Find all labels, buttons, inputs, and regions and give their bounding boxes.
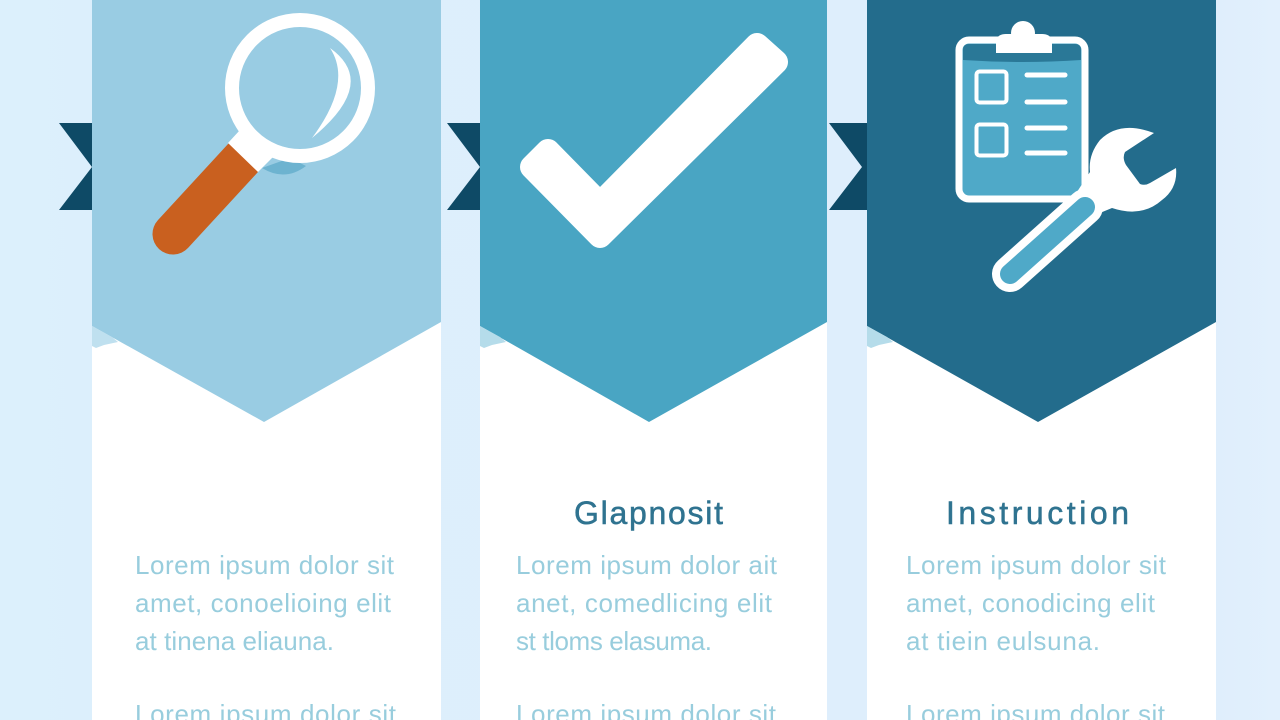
heading 3: Instruction bbox=[946, 495, 1129, 531]
card body 1 bbox=[92, 320, 441, 720]
panel: step 1 bbox=[92, 0, 441, 720]
panel: step 3 bbox=[867, 0, 1216, 720]
body text 1 bbox=[135, 550, 397, 720]
body text 3: amet, conodicing elit bbox=[906, 588, 1156, 618]
chevron banner 3 bbox=[867, 0, 1216, 422]
body text 2: Lorem ipsum dolor ait bbox=[516, 550, 778, 580]
body text 3 bbox=[906, 550, 1167, 720]
card body 3 bbox=[867, 320, 1216, 720]
body text 2: st tloms elasuma. bbox=[516, 626, 712, 656]
ribbon notch: left of panel 1 bbox=[59, 123, 96, 210]
chevron banner 2 bbox=[480, 0, 827, 422]
body text 3: at tiein eulsuna. bbox=[906, 626, 1100, 656]
icon: clipboard and wrench bbox=[959, 21, 1176, 274]
body text 1: at tinena eliauna. bbox=[135, 626, 334, 656]
ribbon notch: left of panel 2 bbox=[447, 123, 484, 210]
panel: step 2 bbox=[480, 0, 827, 720]
body text 1: amet, conoelioing elit bbox=[135, 588, 392, 618]
soft corner 1 bbox=[92, 326, 118, 348]
heading 2: Glapnosit bbox=[574, 495, 723, 531]
soft corner 2 bbox=[480, 326, 506, 348]
chevron banner 1 bbox=[92, 0, 441, 422]
body text 2: anet, comedlicing elit bbox=[516, 588, 773, 618]
icon: magnifying glass bbox=[173, 20, 368, 234]
icon: check mark bbox=[532, 45, 776, 236]
soft corner 3 bbox=[867, 326, 893, 348]
body text 2 bbox=[516, 550, 778, 720]
card body 2 bbox=[480, 320, 827, 720]
ribbon notch: left of panel 3 bbox=[829, 123, 870, 210]
body text 1: Lorem ipsum dolor sit bbox=[135, 550, 395, 580]
body text 3: Lorem ipsum dolor sit bbox=[906, 550, 1167, 580]
